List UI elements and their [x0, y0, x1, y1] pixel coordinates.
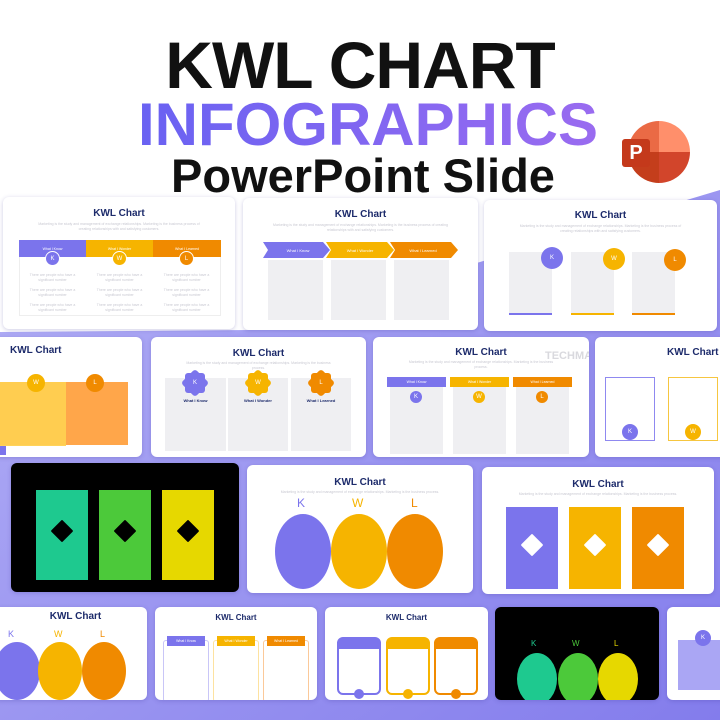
slide C: cards with circles: Marketing is the study and management of exchange relationships. Marketing is the business process of creating relationships with and satisfying customers.	[520, 224, 681, 233]
icon: powerpoint	[622, 121, 690, 183]
slide K: circles: K	[8, 629, 14, 639]
slide O: partial	[667, 607, 720, 700]
slide L: outlined columns: KWL Chart	[215, 613, 257, 622]
slide F: header bars: KWL Chart	[455, 347, 507, 358]
slide K: circles: KWL Chart	[50, 611, 101, 622]
slide B: chevrons: Marketing is the study and management of exchange relationships. Marketing is the business process of creating relationships with and satisfying customers.	[273, 223, 448, 232]
slide J: colored cards: Marketing is the study and management of exchange relationships. Marketing is the business process.	[519, 492, 677, 496]
slide L: outlined columns: What I Wonder	[224, 639, 248, 643]
slide C: cards with circles: W	[611, 256, 617, 262]
slide A: table	[3, 197, 235, 329]
slide N: dark ellipses	[495, 607, 659, 700]
slide F: header bars: Marketing is the study and management of exchange relationships. Marketing is the business process.	[409, 360, 553, 369]
slide E: star badges: What I Learned	[307, 398, 335, 403]
slide A: table: KWL Chart	[93, 208, 145, 219]
slide G: outlined boxes	[595, 337, 720, 457]
slide C: cards with circles: L	[673, 257, 677, 263]
slide A: table: Marketing is the study and management of exchange relationships. Marketing is the business process of creating relationships with and satisfying customers.	[38, 222, 200, 231]
slide B: chevrons: What I Learned	[409, 248, 437, 253]
slide N: dark ellipses: L	[614, 639, 618, 648]
slide F: header bars: W	[476, 394, 482, 400]
slide A: table: There are people who have a significant number	[164, 303, 209, 312]
subtitle: infographics	[0, 93, 720, 157]
slide A: table: What I Learned	[175, 246, 199, 250]
slide N: dark ellipses: W	[572, 639, 580, 648]
slide A: table: There are people who have a significant number	[30, 303, 75, 312]
slide A: table: There are people who have a significant number	[97, 288, 142, 297]
slide J: colored cards: KWL Chart	[572, 479, 624, 490]
slide B: chevrons: KWL Chart	[335, 209, 386, 220]
slide I: ellipses: L	[411, 496, 418, 510]
slide N: dark ellipses: K	[531, 639, 536, 648]
slide G: outlined boxes: KWL Chart	[667, 347, 718, 358]
slide E: star badges: W	[255, 380, 261, 386]
slide O: partial: K	[701, 635, 705, 641]
slide M: header cards	[325, 607, 488, 700]
slide K: circles	[0, 607, 147, 700]
slide E: star badges	[151, 337, 366, 457]
slide E: star badges: Marketing is the study and management of exchange relationships. Marketing is the business process.	[186, 361, 331, 370]
slide C: cards with circles	[484, 200, 717, 331]
slide F: header bars: What I Know	[407, 380, 426, 384]
slide F: header bars	[373, 337, 589, 457]
subtitle: infographics: INFOGRAPHICS	[138, 91, 598, 158]
slide A: table: There are people who have a significant number	[97, 303, 142, 312]
subtitle: powerpoint slide: PowerPoint Slide	[171, 149, 555, 202]
slide E: star badges: What I Wonder	[244, 398, 272, 403]
slide F: header bars: L	[540, 394, 544, 400]
slide E: star badges: What I Know	[184, 398, 208, 403]
slide L: outlined columns: What I Learned	[274, 639, 298, 643]
slide A: table: There are people who have a significant number	[30, 273, 75, 282]
slide D: yellow/orange blocks	[0, 337, 142, 457]
slide A: table: There are people who have a significant number	[30, 288, 75, 297]
slide K: circles: W	[54, 629, 62, 639]
slide I: ellipses: W	[352, 496, 363, 510]
slide L: outlined columns: What I Know	[176, 639, 196, 643]
slide C: cards with circles: KWL Chart	[575, 210, 626, 221]
slide A: table: What I Know	[43, 246, 62, 250]
slide D: yellow/orange blocks: KWL Chart	[10, 345, 61, 356]
slide B: chevrons	[243, 198, 478, 330]
slide A: table: There are people who have a significant number	[164, 273, 209, 282]
slide F: header bars: What I Wonder	[468, 380, 491, 384]
slide A: table: What I Wonder	[108, 246, 131, 250]
slide E: star badges: K	[193, 380, 197, 386]
slide J: colored cards	[482, 467, 714, 594]
slide E: star badges: L	[319, 380, 323, 386]
title: KWL CHART	[165, 28, 555, 102]
slide B: chevrons: What I Wonder	[347, 248, 374, 253]
slide I: ellipses: K	[297, 496, 305, 510]
slide A: table: W	[117, 256, 122, 262]
slide G: outlined boxes: K	[628, 429, 632, 435]
slide K: circles: L	[100, 629, 105, 639]
slide A: table: K	[50, 256, 54, 262]
slide A: table: L	[185, 256, 188, 262]
slide I: ellipses: KWL Chart	[334, 477, 386, 488]
slide D: yellow/orange blocks: L	[93, 380, 97, 386]
slide E: star badges: KWL Chart	[233, 348, 284, 359]
slide A: table: There are people who have a significant number	[97, 273, 142, 282]
slide I: ellipses	[247, 465, 473, 593]
slide G: outlined boxes: W	[690, 429, 696, 435]
slide F: header bars: What I Learned	[531, 380, 554, 384]
slide H: dark cards with diamonds	[11, 463, 239, 592]
slide M: header cards: KWL Chart	[386, 613, 427, 622]
icon: powerpoint: P	[629, 142, 643, 164]
slide F: header bars: K	[414, 394, 418, 400]
slide A: table: There are people who have a significant number	[164, 288, 209, 297]
slide C: cards with circles: K	[550, 255, 554, 261]
slide I: ellipses: Marketing is the study and management of exchange relationships. Marketing is the business process.	[281, 490, 439, 494]
slide B: chevrons: What I Know	[287, 248, 309, 253]
slide D: yellow/orange blocks: W	[33, 380, 39, 386]
slide L: outlined columns	[155, 607, 317, 700]
